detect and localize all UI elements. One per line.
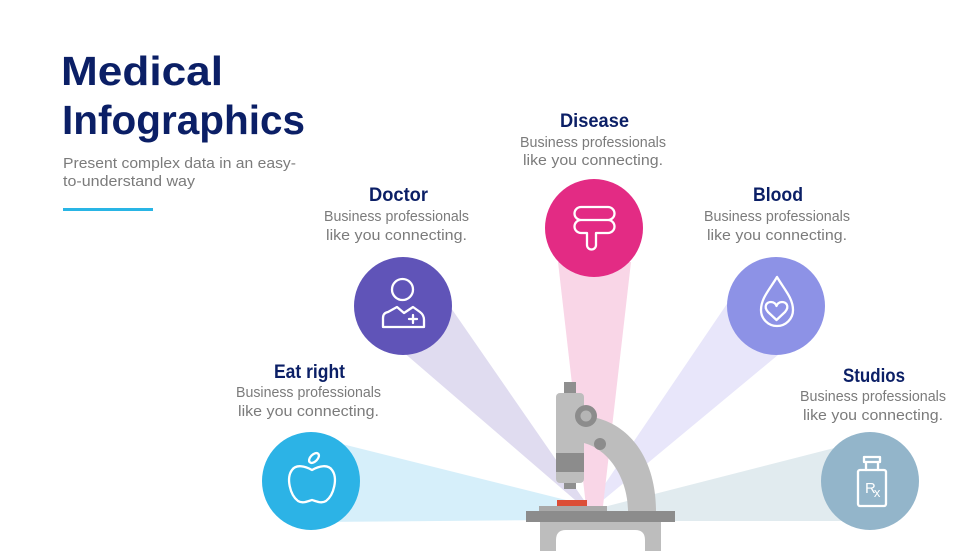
microscope legs xyxy=(540,522,661,551)
blood circle xyxy=(727,257,825,355)
blood text: Business professionals xyxy=(704,208,850,225)
eat right text: like you connecting. xyxy=(238,403,379,420)
title: Medical xyxy=(61,48,223,94)
studios item xyxy=(800,366,946,530)
disease text: Business professionals xyxy=(520,134,666,151)
doctor text: Business professionals xyxy=(324,208,469,225)
disease text: like you connecting. xyxy=(523,152,663,169)
studios text: like you connecting. xyxy=(803,407,943,424)
icon: prescription bottle: x xyxy=(874,485,881,500)
studios text xyxy=(800,388,946,424)
eat right item xyxy=(236,362,381,530)
microscope table xyxy=(526,511,675,522)
light beam: doctor xyxy=(395,292,588,506)
accent rule xyxy=(63,208,153,211)
icon: prescription bottle: R xyxy=(865,480,876,497)
disease heading: Disease xyxy=(560,111,629,132)
doctor text: like you connecting. xyxy=(326,227,467,244)
subtitle: to-understand way xyxy=(63,173,196,190)
microscope xyxy=(526,382,675,551)
eat right heading: Eat right xyxy=(274,362,346,383)
disease item xyxy=(520,111,666,277)
eat right text: Business professionals xyxy=(236,384,381,401)
light beam: studios xyxy=(600,444,850,521)
light beam: blood xyxy=(590,292,790,506)
microscope coarse knob xyxy=(575,405,597,427)
icon: intestine xyxy=(575,207,615,250)
studios circle xyxy=(821,432,919,530)
title: Infographics xyxy=(62,97,305,143)
light beam: disease xyxy=(558,262,631,506)
blood text xyxy=(704,208,850,244)
microscope fine knob xyxy=(594,438,606,450)
microscope slide xyxy=(557,500,587,506)
microscope stage xyxy=(539,506,607,511)
microscope eyepiece xyxy=(564,382,576,393)
doctor text xyxy=(324,208,469,244)
microscope tube band xyxy=(556,453,584,472)
icon: blood drop xyxy=(761,277,793,326)
studios heading: Studios xyxy=(843,366,905,387)
subtitle xyxy=(63,155,296,190)
icon: prescription bottle xyxy=(858,457,886,506)
light beam: eat right xyxy=(320,441,578,522)
microscope arm xyxy=(584,412,656,511)
disease text xyxy=(520,134,666,169)
icon: apple xyxy=(289,451,335,502)
microscope tube xyxy=(556,393,584,483)
doctor item xyxy=(324,185,469,355)
doctor heading: Doctor xyxy=(369,185,429,206)
title xyxy=(61,48,305,143)
disease circle xyxy=(545,179,643,277)
blood item xyxy=(704,185,850,355)
eat right text xyxy=(236,384,381,420)
studios text: Business professionals xyxy=(800,388,946,405)
blood heading: Blood xyxy=(753,185,803,206)
blood text: like you connecting. xyxy=(707,227,847,244)
subtitle: Present complex data in an easy- xyxy=(63,155,296,172)
doctor circle xyxy=(354,257,452,355)
microscope objective lens xyxy=(564,483,576,489)
eat right circle xyxy=(262,432,360,530)
icon: doctor xyxy=(383,279,424,327)
